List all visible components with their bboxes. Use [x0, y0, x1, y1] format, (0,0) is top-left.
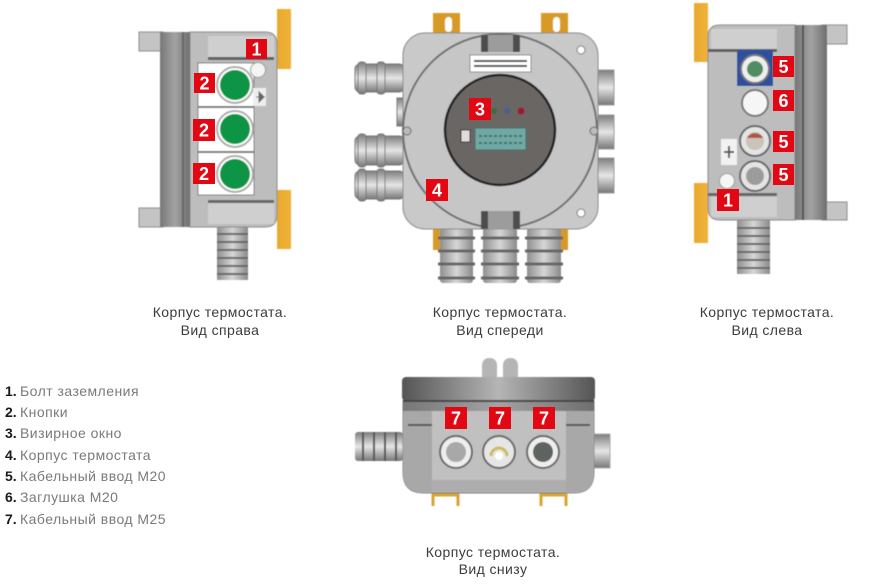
badge 7, second: [489, 407, 511, 429]
badge 7, first: 7: [451, 408, 461, 428]
badge 2, top button: [194, 73, 215, 94]
badge 2, bottom button: 2: [199, 164, 209, 184]
badge 4: 4: [432, 180, 442, 200]
device: right side view: [139, 9, 291, 280]
badge 5, middle gland: [773, 131, 794, 152]
legend: 7.: [5, 511, 17, 527]
badge 5, top gland: [773, 56, 794, 77]
caption: front view: Вид спереди: [456, 322, 544, 338]
legend: 6.: [5, 489, 17, 505]
caption: left view: Вид слева: [731, 322, 803, 338]
badge 2, bottom button: [193, 163, 215, 184]
badge 7, third: 7: [539, 408, 549, 428]
badge 2, middle button: [193, 119, 215, 141]
legend: Кабельный ввод М25: [20, 511, 166, 527]
badge 5, middle gland: 5: [778, 132, 789, 152]
legend: Корпус термостата: [20, 447, 151, 463]
badge 6: [773, 90, 794, 111]
legend: Кнопки: [20, 404, 68, 420]
legend: Болт заземления: [20, 383, 139, 399]
legend: [5, 383, 166, 527]
badge 1, left view: 1: [723, 190, 733, 210]
legend: 4.: [5, 447, 17, 463]
caption: left view: Корпус термостата.: [700, 304, 834, 320]
caption: front view: Корпус термостата.: [433, 304, 567, 320]
badge 7, third: [533, 407, 555, 429]
badge 5, top gland: 5: [778, 57, 789, 77]
badge 1, right view: [246, 39, 267, 60]
badge 2, top button: 2: [199, 74, 210, 94]
badge 1, left view: [717, 189, 739, 211]
badge 3: 3: [475, 100, 485, 120]
legend: Визирное окно: [20, 425, 122, 441]
device: left side view: [694, 3, 847, 274]
legend: 1.: [5, 383, 17, 399]
legend: Кабельный ввод М20: [20, 468, 166, 484]
caption: bottom view: Вид снизу: [459, 561, 527, 577]
badge 7, second: 7: [495, 408, 505, 428]
legend: 2.: [5, 404, 17, 420]
badge 7, first: [445, 407, 467, 429]
badge 5, lower gland: 5: [778, 165, 789, 185]
caption: right view: Корпус термостата.: [153, 304, 287, 320]
legend: 3.: [5, 425, 17, 441]
legend: Заглушка М20: [20, 489, 118, 505]
caption: right view: Вид справа: [181, 322, 259, 338]
badge 2, middle button: 2: [199, 120, 209, 140]
badge 3: [469, 98, 491, 120]
caption: bottom view: Корпус термостата.: [426, 544, 560, 560]
device: front view: [355, 13, 614, 283]
badge 4: [426, 179, 448, 201]
badge 5, lower gland: [773, 164, 794, 185]
badge 1, right view: 1: [251, 40, 262, 60]
badge 6: 6: [778, 91, 789, 111]
device: bottom view: [355, 358, 610, 506]
legend: 5.: [5, 468, 17, 484]
